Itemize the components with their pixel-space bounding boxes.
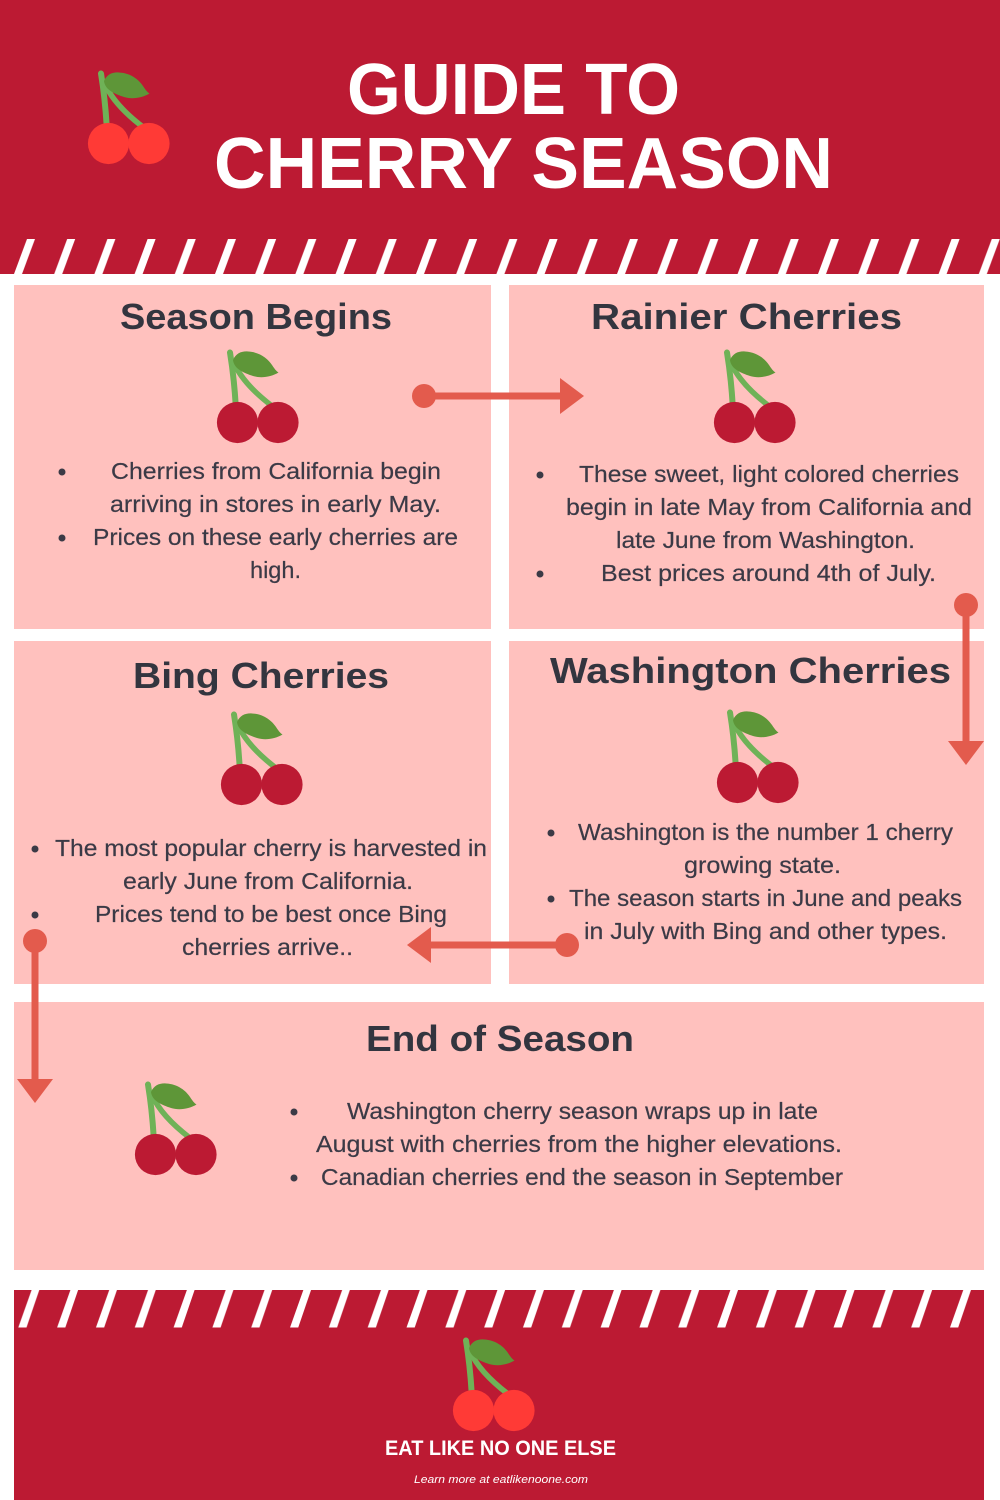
text block: Season Begins bullets: high. (250, 557, 301, 583)
text block: Rainier bullets: Best prices around 4th of July. (601, 560, 936, 586)
footer banner (14, 1290, 984, 1500)
text block: Rainier bullets: begin in late May from California and (566, 494, 972, 520)
icon: cherry (217, 351, 299, 443)
icon: cherry (221, 713, 303, 805)
title (214, 50, 833, 204)
text block: Rainier bullets: late June from Washington. (616, 527, 915, 553)
header banner (0, 0, 1000, 274)
arrow: Washington to Bing (407, 927, 579, 963)
text block: Bing bullets (32, 835, 487, 960)
icon: cherry (717, 711, 799, 803)
text block: Washington bullets: growing state. (684, 852, 841, 878)
icon: header cherry (88, 72, 170, 164)
text block: Rainier bullets (536, 461, 972, 586)
text block: Season Begins bullets (58, 458, 458, 583)
text block: Washington bullets: The season starts in June and peaks (569, 885, 962, 911)
arrow: Bing to End of Season (17, 929, 53, 1103)
text block: Washington bullets: in July with Bing and other types. (584, 918, 947, 944)
panel: Washington Cherries (509, 641, 984, 984)
title: CHERRY SEASON (214, 124, 833, 204)
text block: Season Begins bullets: Prices on these early cherries are (93, 524, 458, 550)
heading: Rainier Cherries: Rainier Cherries (591, 296, 902, 337)
text block: Rainier bullets: These sweet, light colored cherries (579, 461, 959, 487)
panel: End of Season (14, 1002, 984, 1270)
text block: End of Season bullets: Washington cherry season wraps up in late (347, 1098, 818, 1124)
text block: Washington bullets: Washington is the number 1 cherry (578, 819, 954, 845)
heading: Season Begins: Season Begins (120, 296, 392, 337)
text block: Season Begins bullets: arriving in stores in early May. (110, 491, 441, 517)
footer link text: Learn more at eatlikenoone.com (414, 1474, 588, 1486)
panel: Bing Cherries (14, 641, 491, 984)
panel: Season Begins (14, 285, 491, 629)
text block: End of Season bullets (290, 1098, 843, 1190)
text block: Bing bullets: The most popular cherry is harvested in (55, 835, 487, 861)
text block: End of Season bullets: August with cherries from the higher elevations. (316, 1131, 842, 1157)
icon: cherry (714, 351, 796, 443)
heading: Bing Cherries: Bing Cherries (133, 655, 389, 696)
arrow: Season Begins to Rainier (412, 378, 584, 414)
text block: End of Season bullets: Canadian cherries end the season in September (321, 1164, 843, 1190)
footer title: EAT LIKE NO ONE ELSE (385, 1437, 616, 1460)
text block: Season Begins bullets: Cherries from California begin (111, 458, 441, 484)
icon: footer cherry (453, 1339, 535, 1431)
panel: Rainier Cherries (509, 285, 984, 629)
icon: cherry (135, 1083, 217, 1175)
text block: Bing bullets: Prices tend to be best once Bing (95, 901, 447, 927)
title: GUIDE TO (347, 50, 680, 130)
text block: Bing bullets: early June from California. (123, 868, 413, 894)
heading: Washington Cherries: Washington Cherries (550, 650, 951, 691)
arrow: Rainier to Washington (948, 593, 984, 765)
text block: Washington bullets (548, 819, 962, 944)
text block: Bing bullets: cherries arrive.. (182, 934, 353, 960)
heading: End of Season: End of Season (366, 1018, 634, 1059)
